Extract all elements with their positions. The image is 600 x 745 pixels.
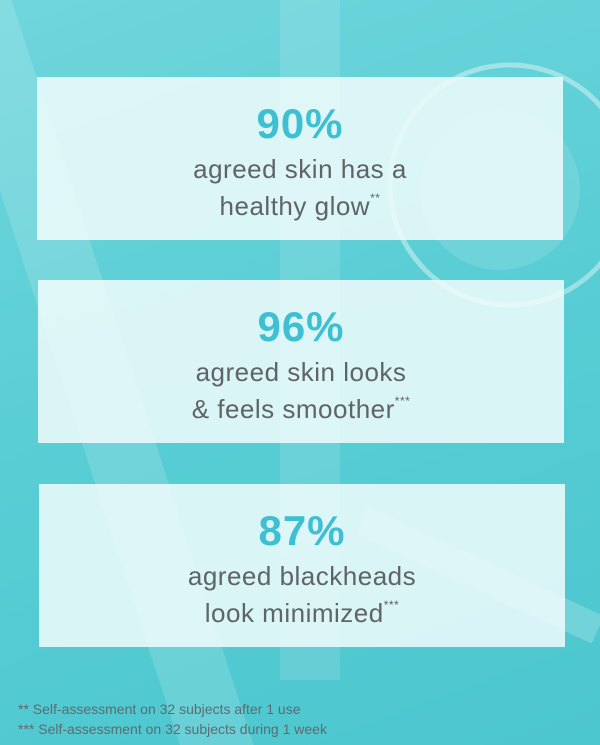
footnotes: [18, 701, 327, 737]
text: healthy glow: healthy glow**: [220, 191, 380, 221]
footnotes: ** Self-assessment on 32 subjects after 1 use: [18, 701, 300, 717]
text: smoother: agreed skin looks: [196, 357, 406, 387]
number 96%: 96%: [257, 303, 345, 350]
text: healthy glow: [193, 154, 407, 221]
text: healthy glow: agreed skin has a: [193, 154, 407, 184]
panel: 96%: [38, 280, 564, 443]
number 87%: 87%: [258, 507, 346, 554]
footnotes: *** Self-assessment on 32 subjects during 1 week: [18, 721, 327, 737]
text: smoother: [192, 357, 410, 424]
number 90%: 90%: [256, 100, 344, 147]
text: blackheads: look minimized***: [205, 598, 399, 628]
panel: 90%: [37, 77, 563, 240]
text: blackheads: agreed blackheads: [188, 561, 416, 591]
text: blackheads: [188, 561, 416, 628]
panel: 87%: [39, 484, 565, 647]
text: smoother: & feels smoother***: [192, 394, 410, 424]
